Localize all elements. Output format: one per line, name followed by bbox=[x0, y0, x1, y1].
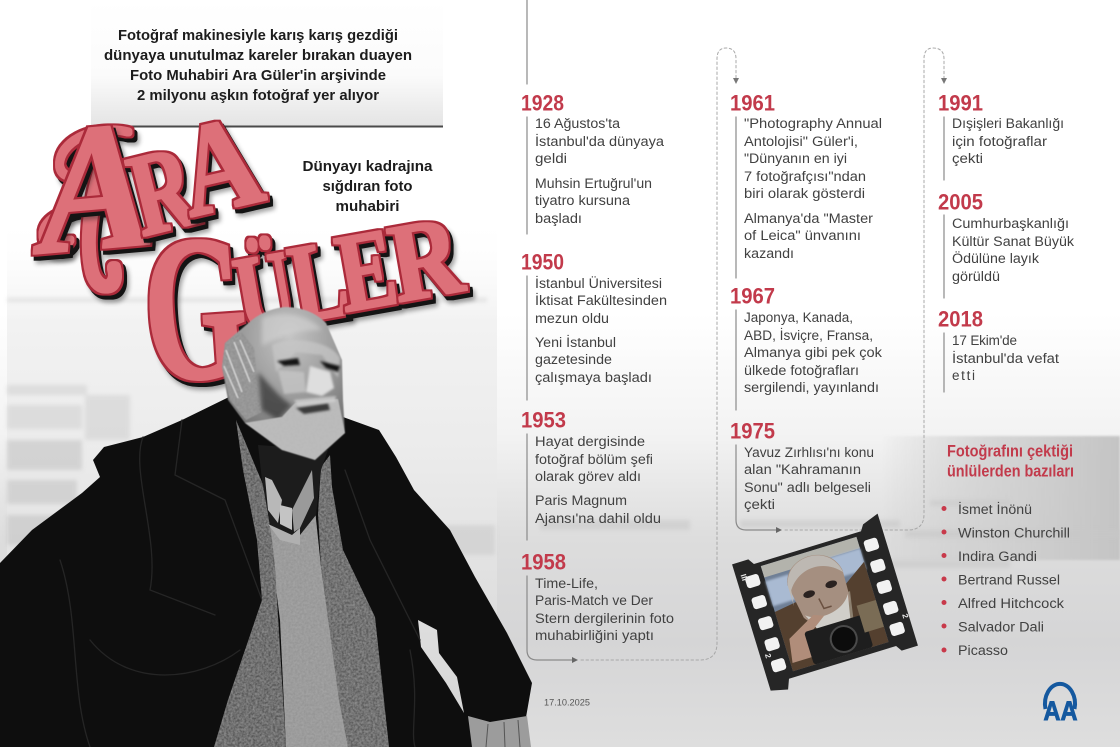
entry 2018: 2018 bbox=[938, 306, 983, 332]
title word: Güler bbox=[136, 189, 472, 427]
shaded cheek bbox=[258, 372, 292, 420]
list of famous subjects: Picasso bbox=[958, 643, 1008, 658]
entry 1928: İstanbul'da dünyaya bbox=[535, 134, 665, 149]
title word: Ara: A bbox=[19, 83, 161, 294]
heading: famous subjects bbox=[947, 442, 1074, 480]
entry 1967: sergilendi, yayınlandı bbox=[744, 380, 879, 395]
subtitle: sığdıran foto bbox=[322, 178, 412, 195]
hand bbox=[468, 716, 531, 747]
list of famous subjects: Salvador Dali bbox=[958, 620, 1044, 634]
entry 1950: 1950 bbox=[521, 250, 564, 274]
film holes bbox=[744, 537, 906, 673]
entry 1991: çekti bbox=[952, 151, 983, 166]
entry 2005 bbox=[938, 190, 1074, 284]
title word: Güler: L bbox=[281, 216, 357, 347]
entry 1967: ABD, İsviçre, Fransa, bbox=[744, 328, 873, 343]
entry 1967: 1967 bbox=[730, 284, 775, 308]
hair bbox=[222, 330, 262, 420]
summary text bbox=[104, 27, 412, 104]
entry 1975: alan "Kahramanın bbox=[744, 462, 861, 477]
entry 1967: Japonya, Kanada, bbox=[744, 310, 853, 325]
entry 2005: Cumhurbaşkanlığı bbox=[952, 216, 1069, 231]
logo: AA bbox=[1044, 684, 1078, 726]
entry 1950: İstanbul Üniversitesi bbox=[535, 276, 662, 291]
beard bbox=[245, 399, 345, 460]
sweater bbox=[268, 500, 348, 747]
subtitle: muhabiri bbox=[336, 198, 400, 215]
entry 1975: Yavuz Zırhlısı'nı konu bbox=[744, 445, 874, 460]
portrait of Ara Güler bbox=[0, 307, 532, 747]
entry 1961: of Leica" ünvanını bbox=[744, 228, 861, 243]
entry 1961: "Photography Annual bbox=[744, 116, 882, 131]
list of famous subjects: Bertrand Russel bbox=[958, 572, 1060, 588]
subtitle: Dünyayı kadrajına bbox=[302, 158, 433, 175]
title: Ara Güler bbox=[19, 83, 472, 427]
title word: Ara: A bbox=[164, 87, 274, 245]
entry 1975 bbox=[730, 418, 874, 512]
entry 1961: 7 fotoğrafçısı"ndan bbox=[744, 169, 866, 184]
entry 1967 bbox=[730, 284, 882, 395]
logo: AA: AA bbox=[1044, 696, 1078, 726]
entry 2005: 2005 bbox=[938, 190, 983, 214]
summary text: dünyaya unutulmaz kareler bırakan duayen bbox=[104, 47, 412, 64]
jacket bbox=[768, 562, 889, 671]
list of famous subjects: Winston Churchill bbox=[958, 526, 1070, 540]
arrow bbox=[776, 527, 782, 533]
entry 1953: olarak görev aldı bbox=[535, 469, 641, 484]
entry 1991: Dışişleri Bakanlığı bbox=[952, 116, 1064, 131]
entry 1961: Almanya'da "Master bbox=[744, 211, 874, 226]
arrow bbox=[941, 78, 947, 84]
entry 1991: için fotoğraflar bbox=[952, 134, 1048, 149]
entry 1961: "Dünyanın en iyi bbox=[744, 151, 847, 166]
camera bbox=[804, 614, 873, 665]
entry 1928: Muhsin Ertuğrul'un bbox=[535, 176, 652, 191]
nose bbox=[306, 366, 334, 396]
entry 1953 bbox=[521, 408, 661, 526]
mouth bbox=[296, 403, 330, 414]
entry 2005: Ödülüne layık bbox=[952, 251, 1039, 266]
entry 1961: kazandı bbox=[744, 246, 794, 261]
entry 1975: çekti bbox=[744, 497, 775, 512]
entry 1975: Sonu" adlı belgeseli bbox=[744, 480, 871, 495]
entry 2018: 17 Ekim'de bbox=[952, 333, 1017, 348]
entry 1967: ülkede fotoğrafları bbox=[744, 363, 859, 378]
head bbox=[222, 307, 345, 460]
entry 1953: 1953 bbox=[521, 408, 566, 432]
film marks: 2 bbox=[763, 652, 773, 660]
title word: Güler: G bbox=[136, 189, 254, 427]
entry 1928: 16 Ağustos'ta bbox=[535, 116, 621, 131]
photo bbox=[761, 537, 889, 671]
title word: Ara: R bbox=[117, 120, 210, 262]
date: 17.10.2025 bbox=[544, 698, 590, 708]
timeline: third column bbox=[938, 90, 1074, 392]
film marks bbox=[739, 531, 910, 662]
entry 1928: 1928 bbox=[521, 90, 564, 116]
entry 1950: gazetesinde bbox=[535, 352, 612, 367]
brow and cheek light bbox=[272, 340, 340, 378]
film strip photo bbox=[730, 513, 920, 694]
hand bbox=[781, 612, 835, 663]
film frame bbox=[730, 514, 919, 694]
entry 1958: Stern dergilerinin foto bbox=[535, 611, 674, 626]
entry 1958: muhabirliğini yaptı bbox=[535, 628, 654, 643]
entry 2018: etti bbox=[952, 368, 975, 383]
entry 1961: Antolojisi" Güler'i, bbox=[744, 134, 858, 149]
entry 1958: 1958 bbox=[521, 550, 566, 574]
entry 1958: Paris-Match ve Der bbox=[535, 593, 654, 608]
connector lines bbox=[527, 0, 572, 660]
entry 1961: 1961 bbox=[730, 90, 775, 116]
entry 1928: başladı bbox=[535, 211, 582, 226]
entry 1928 bbox=[521, 90, 665, 226]
dashed connector bbox=[581, 48, 736, 660]
timeline: second column bbox=[730, 48, 947, 533]
dome highlight bbox=[262, 314, 322, 346]
entry 1991 bbox=[938, 90, 1064, 166]
entry 1958 bbox=[521, 550, 674, 643]
film marks: 2 bbox=[900, 613, 910, 620]
entry 2005: Kültür Sanat Büyük bbox=[952, 234, 1074, 249]
title word: Ara bbox=[19, 83, 274, 294]
heading: famous subjects: Fotoğrafını çektiği bbox=[947, 442, 1073, 460]
entry 1961 bbox=[730, 90, 882, 261]
connector lines bbox=[736, 117, 776, 530]
entry 1958: Time-Life, bbox=[535, 576, 598, 591]
entry 2018 bbox=[938, 306, 1059, 383]
connector lines bbox=[943, 117, 945, 392]
shirt collar bbox=[258, 445, 328, 545]
list of famous subjects: Indira Gandi bbox=[958, 549, 1037, 564]
entry 1950: çalışmaya başladı bbox=[535, 370, 652, 385]
arrow bbox=[572, 657, 578, 663]
entry 1950 bbox=[521, 250, 667, 385]
coat bbox=[0, 397, 532, 747]
list of famous subjects bbox=[942, 502, 1070, 658]
entry 1991: 1991 bbox=[938, 90, 983, 116]
entry 1950: mezun oldu bbox=[535, 311, 609, 326]
title word: Güler: E bbox=[328, 203, 405, 336]
dashed connector bbox=[785, 48, 944, 530]
title word: Güler: Ü bbox=[226, 227, 303, 357]
scarf bbox=[214, 420, 389, 747]
entry 2005: görüldü bbox=[952, 269, 1000, 284]
entry 1975: 1975 bbox=[730, 418, 775, 444]
face bbox=[781, 548, 856, 631]
film marks: III bbox=[739, 573, 749, 582]
title word: Güler: R bbox=[380, 192, 472, 326]
top summary panel bbox=[91, 0, 443, 128]
entry 1928: tiyatro kursuna bbox=[535, 193, 631, 208]
entry 1950: İktisat Fakültesinden bbox=[535, 293, 667, 308]
entry 1953: Ajansı'na dahil oldu bbox=[535, 511, 661, 526]
heading: famous subjects: ünlülerden bazıları bbox=[947, 462, 1074, 480]
entry 1953: Hayat dergisinde bbox=[535, 434, 645, 449]
entry 1950: Yeni İstanbul bbox=[535, 335, 616, 350]
eyes bbox=[277, 358, 340, 372]
subtitle bbox=[302, 158, 433, 215]
entry 1953: fotoğraf bölüm şefi bbox=[535, 452, 653, 467]
summary text: Fotoğraf makinesiyle karış karış gezdiği bbox=[118, 27, 398, 44]
entry 1928: geldi bbox=[535, 151, 567, 166]
entry 1953: Paris Magnum bbox=[535, 493, 627, 508]
arrow bbox=[733, 78, 739, 84]
entry 2018: İstanbul'da vefat bbox=[952, 351, 1059, 366]
list of famous subjects: İsmet İnönü bbox=[958, 502, 1032, 517]
list of famous subjects: Alfred Hitchcock bbox=[958, 596, 1064, 611]
summary text: 2 milyonu aşkın fotoğraf yer alıyor bbox=[137, 87, 379, 104]
entry 1961: biri olarak gösterdi bbox=[744, 186, 865, 201]
entry 1967: Almanya gibi pek çok bbox=[744, 345, 882, 360]
timeline: first column bbox=[521, 0, 739, 663]
summary text: Foto Muhabiri Ara Güler'in arşivinde bbox=[130, 67, 386, 84]
